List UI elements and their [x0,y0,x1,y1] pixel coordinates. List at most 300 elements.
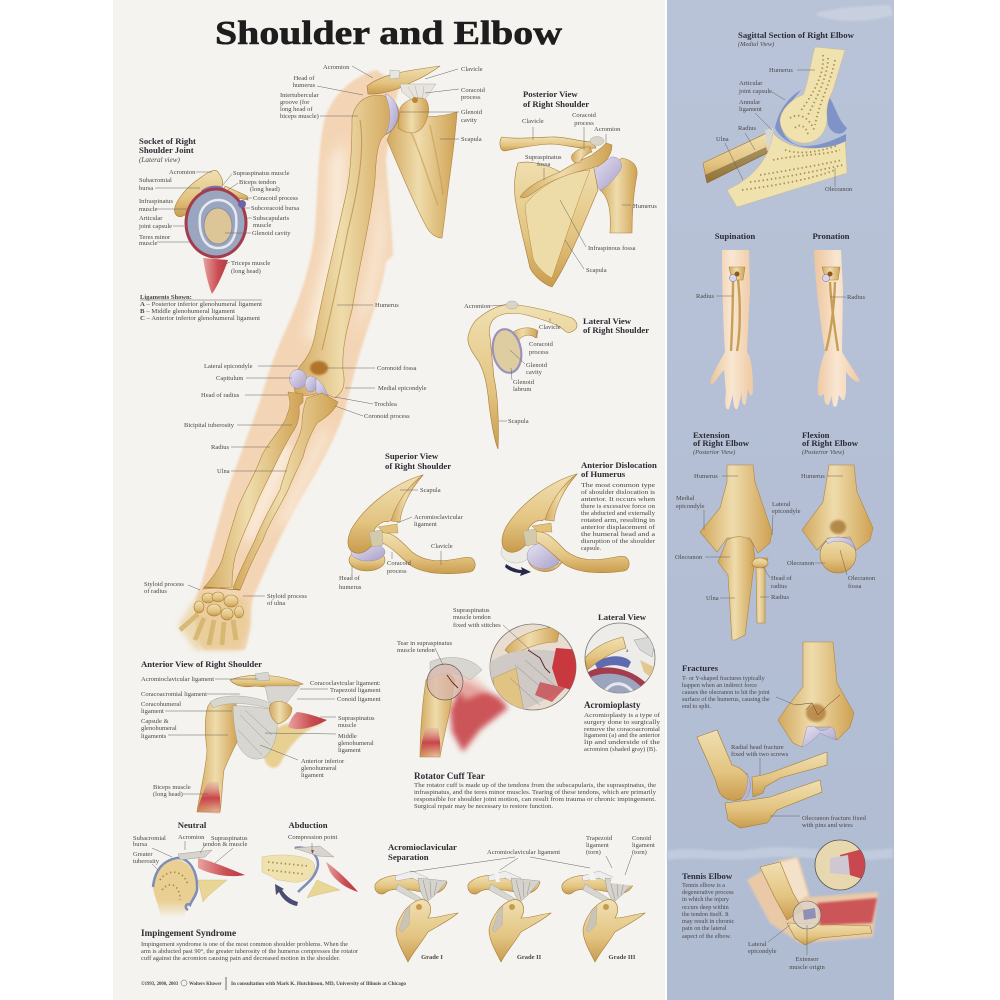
sagittal labels: joint capsule [738,88,772,95]
right labels: Trochlea [374,401,397,408]
heading: flexion: Flexion [802,430,830,440]
sagittal labels: Annular [739,99,761,106]
radial head fracture illustration [697,730,827,828]
socket labels: Articular [139,215,163,222]
dislocation text block: The most common type [581,482,655,489]
fractures text block: end to split. [682,703,711,710]
lateral labels: Glenoid [513,379,535,386]
panel: pronation [812,231,866,407]
neutral labels [133,834,248,870]
footer credits: Wolters Kluwer [189,982,223,987]
socket labels: muscle [139,240,158,247]
rotator cuff text block: The rotator cuff is made up of the tendons from the subscapularis, the supraspinatus, the [414,782,656,789]
lateral labels: Glenoid [526,362,548,369]
anterior labels: Supraspinatus [338,715,375,722]
heading: superior view: Superior View [385,451,439,461]
fracture labels: with pins and wires [802,822,853,829]
dislocation text block: anterior. It occurs when [581,496,655,503]
panel: tennis elbow [682,840,878,971]
dislocation text block: disruption of the shoulder [581,538,655,545]
tennis elbow labels: Lateral [748,941,767,948]
extension labels: radius [771,583,787,590]
wrist and hand bones [178,592,250,650]
fractures text block: happen when an indirect force [682,682,757,689]
neutral labels: Greater [133,851,153,858]
rotator cuff labels [397,607,530,665]
acromioplasty text block: remove the coracoacromial [584,726,660,733]
posterior illustration [500,136,637,287]
superior labels: Head of [339,575,361,582]
heading: socket: (Lateral view) [139,156,181,164]
superior labels: Scapula [420,487,441,494]
pronation label: Radius [847,294,866,301]
footer credits: In consultation with Mark K. Hutchinson, MD, University of Illinois at Chicago [231,981,406,987]
scapula and clavicle, superior [348,475,475,574]
right blue panel [667,0,894,1000]
elbow cartilage [290,370,329,400]
anterior labels: glenohumeral [301,765,337,772]
socket labels: (long head) [231,268,261,275]
AC separation labels: Conoid [632,835,652,842]
heading: AC separation: Acromioclavicular [388,842,457,852]
heading: lateral view: of Right Shoulder [583,325,649,335]
heading: anterior view: Anterior View of Right Shoulder [141,659,262,669]
heading: impingement syndrome: Impingement Syndrome [141,928,236,938]
lateral labels [464,303,561,425]
extension labels: Medial [676,495,695,502]
socket labels: Coracoid process [253,195,298,202]
posterior labels: process [574,120,594,127]
tennis elbow text block [682,882,735,940]
anterior labels: Biceps muscle [153,784,191,791]
left labels: Styloid process [144,581,184,588]
coronoid fossa [310,361,328,375]
impingement text block: arm is abducted past 90°, the greater tuberosity of the humerus compresses the rotator [141,948,358,955]
extension labels: Lateral [772,501,791,508]
neutral labels: tendon & muscle [203,841,248,848]
neutral labels: Supraspinatus [211,835,248,842]
dislocation text block: there is excessive force on [581,503,655,510]
heading: neutral: Neutral [178,820,207,830]
flexion labels [787,473,876,590]
heading: lateral view [583,316,649,335]
arrow: abduction movement [275,884,298,906]
socket labels: bursa [139,185,153,192]
impingement text block [141,941,358,962]
acromioplasty text block: ligament (a) and the anterior [584,732,660,739]
impingement text block: Impingement syndrome is one of the most common shoulder problems. When the [141,941,348,948]
posterior labels [522,112,657,274]
socket labels [138,169,299,275]
rotator cuff labels: muscle tendon [397,647,435,654]
arrow: displacement direction [505,564,531,576]
lateral labels: Coracoid [529,341,554,348]
ligaments shown legend [140,294,262,322]
small circle on tear [427,664,463,700]
impingement text block: cuff against the acromion causing pain and decreased motion in the shoulder. [141,955,340,962]
posterior labels: fossa [537,161,550,168]
dislocation text block: capsule. [581,545,602,552]
socket labels: Teres minor [139,234,171,241]
extension labels: epicondyle [676,503,705,510]
heading: abduction: Abduction [288,820,328,830]
displaced head behind the clavicle [501,541,562,572]
extension labels: Ulna [706,595,719,602]
neutral labels: Acromion [178,834,205,841]
dislocation text block: the abducted and externally [581,510,656,517]
sagittal labels: Olecranon [825,186,853,193]
lateral labels: process [529,349,549,356]
posterior labels: Infraspinous fossa [588,245,636,252]
sagittal labels [716,67,853,193]
right labels: Coronoid fossa [377,365,417,372]
heading: sagittal section: Sagittal Section of Right Elbow [738,30,855,40]
sagittal illustration [703,47,847,207]
tennis elbow text block: Tennis elbow is a [682,882,725,889]
left labels: humerus [293,82,316,89]
acromioplasty circle illustration [585,623,656,700]
rotator cuff labels: Supraspinatus [453,607,490,614]
panel: rotator cuff tear [397,607,657,810]
lateral labels: Clavicle [539,324,561,331]
tennis elbow text block: pain on the lateral [682,925,727,932]
left labels: Intertubercular [280,92,319,99]
socket labels: Subcoracoid bursa [251,205,299,212]
AC separation labels: Trapezoid [586,835,613,842]
heading: posterior view: Posterior View [523,89,578,99]
fractures text block: T- or Y-shaped fractures typically [682,675,766,682]
sagittal labels: Ulna [716,136,729,143]
right labels: of ulna [267,600,285,607]
fractured distal humerus illustration [776,642,854,747]
pronation forearm and hand [814,250,860,407]
socket illustration [175,170,248,294]
abduction label: Compression point [288,834,337,841]
socket labels: Subacromial [139,177,172,184]
grade II illustration [468,871,551,962]
AC separation labels: Acromioclavicular ligament [487,849,560,856]
heading: rotator cuff tear: Rotator Cuff Tear [414,771,485,781]
left labels: Radius [211,444,230,451]
heading: sagittal section [738,30,855,48]
socket labels: Supraspinatus muscle [233,170,290,177]
right labels: Coracoid [461,87,486,94]
anterior labels: ligaments [141,733,167,740]
anterior illustration [197,672,327,814]
heading: flexion: (Posterior View) [802,449,844,456]
heading: socket: Shoulder Joint [139,145,194,155]
fractures text block: causes the olecranon to hit the joint [682,689,770,696]
grade III illustration [562,871,645,962]
left labels: Head of [294,75,315,82]
footer credits [141,977,406,990]
heading: acromioplasty: Acromioplasty [584,700,641,710]
panel: lateral view of right shoulder [464,301,649,449]
left labels: groove (for [280,99,310,106]
panel: supination [696,231,755,409]
left labels: Lateral epicondyle [204,363,253,370]
anterior labels: Coracohumeral [141,701,181,708]
anterior labels: Capsule & [141,718,169,725]
rotator cuff labels: muscle tendon [453,614,491,621]
heading: supination: Supination [715,231,755,241]
sagittal labels: ligament [739,106,762,113]
neutral illustration [153,850,245,918]
skin highlight of upper arm and forearm [240,140,384,540]
tennis elbow text block: in which the injury [682,896,730,903]
humeral head cartilage [385,94,398,134]
right labels: Clavicle [461,66,483,73]
panel: flexion of right elbow [787,430,876,590]
heading: tennis elbow: Tennis Elbow [682,871,733,881]
superior labels: Clavicle [431,543,453,550]
heading: lateral view: Lateral View [583,316,632,326]
heading: posterior view [523,89,589,109]
heading: sagittal section: (Medial View) [738,41,774,48]
ligaments shown legend: B – Middle glenohumeral ligament [140,308,235,315]
abduction illustration [262,846,358,898]
poster background [113,0,665,1000]
heading: AC separation [388,842,457,862]
panel: sagittal section of right elbow [703,30,855,207]
acromioplasty text block: acromion (shaded gray) (B). [584,746,657,753]
left labels: of radius [144,588,167,595]
extension labels: Radius [771,594,790,601]
neutral labels: bursa [133,841,147,848]
left labels: Bicipital tuberosity [184,422,235,429]
AC separation labels [410,835,655,961]
right labels: Glenoid [461,109,483,116]
anterior labels: ligament [338,747,361,754]
right labels [243,66,486,607]
fracture labels: fixed with two screws [731,751,789,758]
panel: neutral position [133,820,248,918]
rotator cuff labels: fixed with stitches [453,622,501,629]
fractures text block: surface of the humerus, causing the [682,696,770,703]
grade I illustration [375,871,458,962]
left labels: long head of [280,106,313,113]
heading: flexion [802,430,859,456]
neutral labels: tuberosity [133,858,160,865]
lateral scapula illustration [468,301,577,449]
AC separation labels: Grade III [609,954,636,961]
tennis elbow labels: muscle origin [789,964,826,971]
panel: posterior view of right shoulder [500,89,657,287]
socket labels: Biceps tendon [239,179,277,186]
supination label [696,293,733,300]
heading: superior view [385,451,451,471]
flexion labels: Humerus [801,473,825,480]
anterior labels: Middle [338,733,357,740]
flexion labels: Olecranon [848,575,876,582]
arm skin silhouette [195,70,400,650]
anterior labels: ligament [141,708,164,715]
acromioplasty text block: lip and underside of the [584,739,660,746]
dislocation text block: of shoulder dislocation is [581,489,656,496]
tennis elbow magnified circle [815,840,866,890]
anterior labels [141,676,381,798]
rotator cuff labels: Tear in supraspinatus [397,640,453,647]
anterior labels: (long head) [153,791,183,798]
socket labels: joint capsule [138,223,172,230]
socket labels: muscle [139,206,158,213]
socket labels: Triceps muscle [231,260,270,267]
dislocation text block [581,482,656,552]
anterior labels: Anterior inferior [301,758,345,765]
panel: extension of right elbow [675,430,801,640]
fractures text block [682,675,770,710]
extension labels: epicondyle [772,508,801,515]
socket labels: Infraspinatus [139,198,173,205]
panel: anterior dislocation of humerus [501,460,657,576]
AC separation labels: ligament [586,842,609,849]
ligament fan [400,84,436,108]
supination forearm and hand [710,250,753,409]
dislocation text block: rotated arm, resulting in [581,517,655,524]
tennis elbow text block: degenerative process [682,889,734,896]
scapula [387,112,457,238]
superior labels: Acromioclavicular [414,514,464,521]
fracture labels: Olecranon fracture fixed [802,815,867,822]
anterior labels: glenohumeral [338,740,374,747]
tennis elbow labels: epicondyle [748,948,777,955]
torn ligament gaps [494,870,640,886]
right labels: Medial epicondyle [378,385,427,392]
left labels: Head of radius [201,392,240,399]
ligaments shown legend: Ligaments Shown: [140,294,192,301]
tennis elbow text block: may result in chronic [682,918,735,925]
heading: extension: (Posterior View) [693,449,735,456]
rotator cuff arm illustration [420,657,508,757]
left labels: Acromion [323,64,350,71]
heading: socket [139,136,196,164]
right labels: Scapula [461,136,482,143]
posterior labels: Acromion [594,126,621,133]
sagittal labels: Articular [739,80,763,87]
extension labels: Olecranon [675,554,703,561]
lateral labels: Acromion [464,303,491,310]
flexion labels: fossa [848,583,861,590]
panel: socket of right shoulder joint [138,136,299,322]
posterior labels: Scapula [586,267,607,274]
posterior labels: Clavicle [522,118,544,125]
anterior labels: Acromioclavicular ligament [141,676,214,683]
fracture labels: Radial head fracture [731,744,784,751]
heading: extension: Extension [693,430,730,440]
heading: anterior dislocation: of Humerus [581,469,626,479]
heading: extension [693,430,750,456]
pronation label [830,294,866,301]
heading: anterior dislocation [581,460,657,479]
dislocation text block: anterior displacement of [581,524,656,531]
panel: abduction position [262,820,358,906]
panel: superior view of right shoulder [339,451,475,591]
tennis elbow illustration [747,857,878,945]
right labels: cavity [461,117,478,124]
fracture labels [731,744,867,829]
heading: fractures: Fractures [682,663,719,673]
heading: lateral view circle: Lateral View [598,612,647,622]
tennis elbow labels [748,925,826,971]
coracoid process [398,98,429,133]
tennis elbow text block: occurs deep within [682,904,729,911]
sagittal labels: Radius [738,125,757,132]
extension illustration [700,465,772,640]
extension labels: Humerus [694,473,718,480]
ulna [233,393,338,590]
panel: impingement syndrome text [141,928,358,962]
panel: fractures [682,642,867,829]
socket labels: Glenoid cavity [252,230,291,237]
heading: posterior view: of Right Shoulder [523,99,589,109]
posterior labels: Coracoid [572,112,597,119]
left labels: Ulna [217,468,230,475]
anterior labels: muscle [338,722,357,729]
AC separation labels: Grade I [421,954,443,961]
AC separation labels: Grade II [517,954,542,961]
right labels: Styloid process [267,593,307,600]
tennis elbow text block: the tendon itself. It [682,911,729,918]
superior labels: Coracoid [387,560,412,567]
anterior labels: Coracoclavicular ligament: [310,680,381,687]
right labels: process [461,94,481,101]
dislocation text block: the humeral head and a [581,531,655,538]
sagittal labels: Humerus [769,67,793,74]
panel: main arm skeleton [144,64,486,650]
left labels: Capitulum [216,375,243,382]
anterior labels: glenohumeral [141,725,177,732]
anterior labels: Trapezoid ligament [330,687,381,694]
posterior labels: Humerus [633,203,657,210]
AC separation labels: (torn) [632,849,647,856]
acromioplasty circle illustration: a [626,648,629,654]
anterior labels: Coracoacromial ligament [141,691,207,698]
acromioplasty text block [584,712,661,753]
supination label: Radius [696,293,715,300]
socket labels: Acromion [169,169,196,176]
tennis elbow labels: Extensor [795,956,819,963]
socket labels: (long head) [250,186,280,193]
acromioplasty text block: surgery done to surgically [584,719,661,726]
heading: anterior dislocation: Anterior Dislocation [581,460,657,470]
superior labels [339,487,464,591]
AC separation labels: (torn) [586,849,601,856]
heading: pronation: Pronation [812,231,850,241]
extension labels [675,473,801,602]
heading: flexion: of Right Elbow [802,438,859,448]
flexion illustration [802,465,873,573]
ligaments shown legend: C – Anterior inferior glenohumeral ligament [140,315,260,322]
rotator cuff text block [414,782,657,810]
rotator cuff text block: Surgical repair may be necessary to restore function. [414,803,553,810]
rotator cuff text block: infraspinatus, and the teres minor muscles. Tearing of these tendons, which are primarily [414,789,657,796]
superior labels: ligament [414,521,437,528]
heading: extension: of Right Elbow [693,438,750,448]
AC separation labels: ligament [632,842,655,849]
right labels: Humerus [375,302,399,309]
radius [203,392,303,589]
tennis elbow text block: aspect of the elbow. [682,933,732,940]
left labels: biceps muscle) [280,113,319,120]
lateral labels: Scapula [508,418,529,425]
clavicle and acromion [367,66,440,94]
magnified tear circle [490,624,580,712]
neutral labels: Subacromial [133,835,166,842]
panel: acromioclavicular separation [375,835,655,962]
socket labels: Subscapularis [253,215,290,222]
superior labels: humerus [339,584,362,591]
right labels: Coronoid process [364,413,410,420]
